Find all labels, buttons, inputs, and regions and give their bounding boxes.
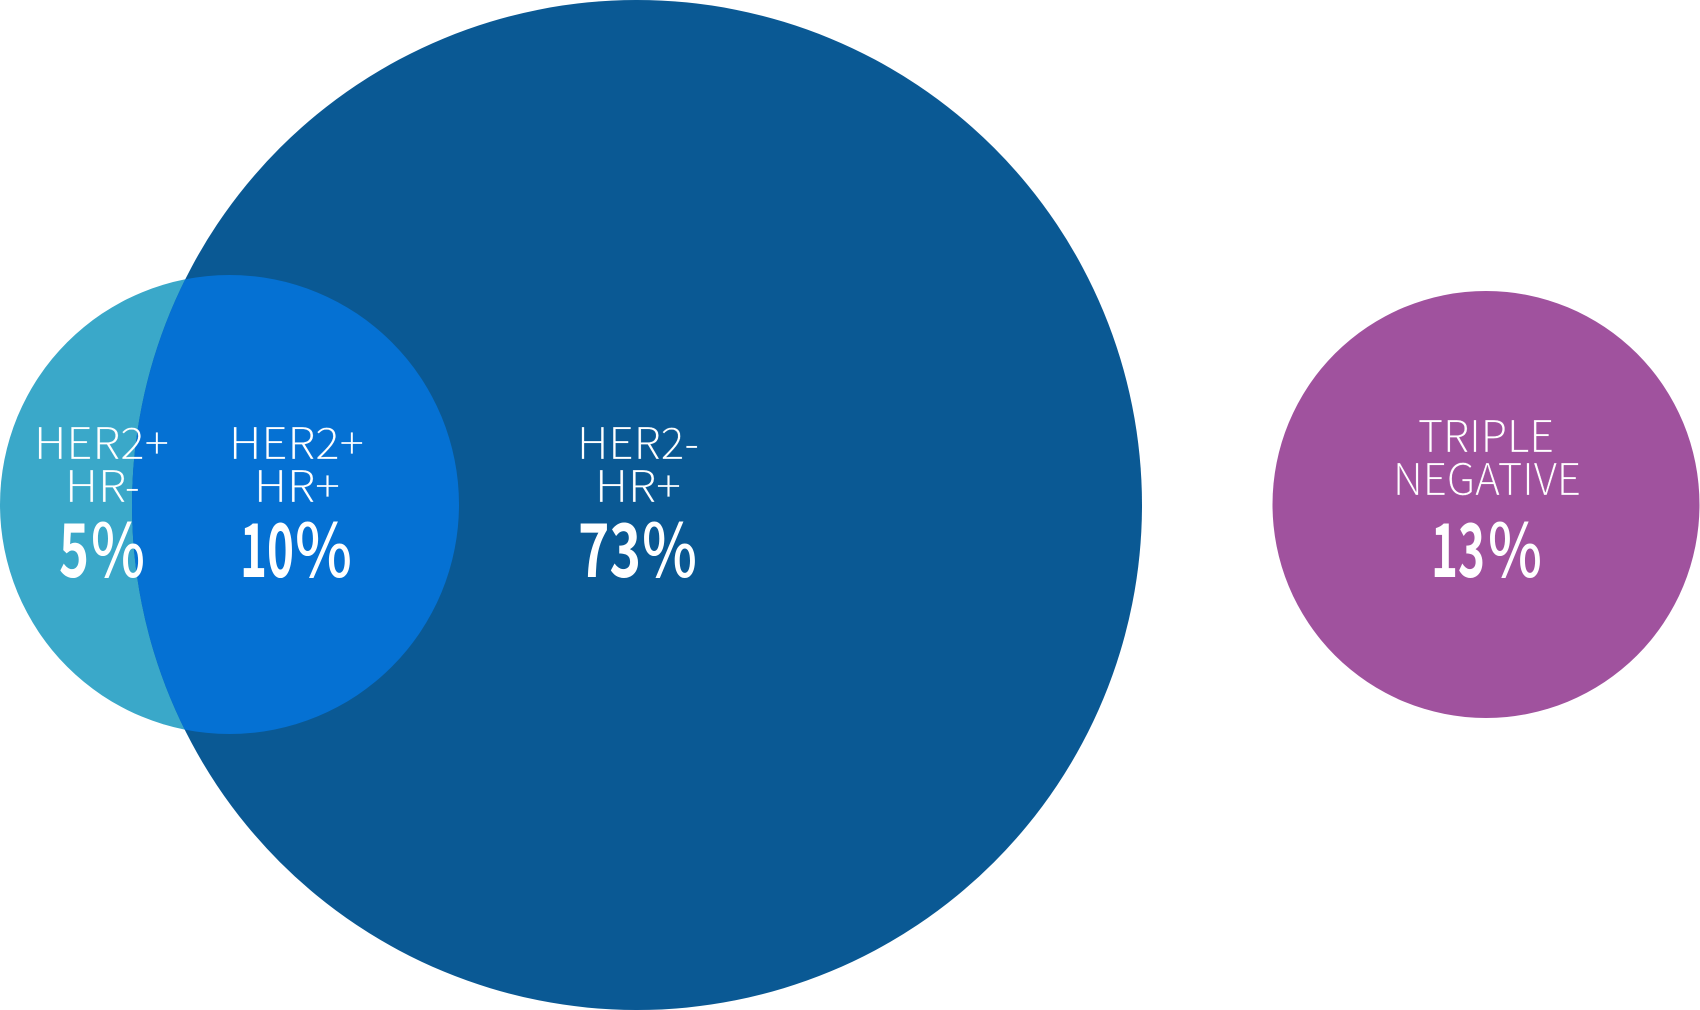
label: HER2+ HR+ 10%: HER2+ (229, 408, 364, 472)
circle overlap: HER2+ HR+ (132, 275, 459, 734)
circle: triple negative (1272, 291, 1700, 718)
label: triple negative 13%: TRIPLE (1418, 401, 1554, 465)
label: HER2+ HR- 5%: HER2+ (34, 408, 169, 472)
label: HER2- HR+ 73%: HER2- (577, 408, 699, 472)
label: triple negative 13%: % (1488, 492, 1542, 599)
circle: HER2- HR+ (132, 0, 1142, 1010)
label: triple negative 13%: 13 (1431, 492, 1485, 599)
label: HER2+ HR+ 10%: % (295, 492, 352, 599)
label: HER2- HR+ 73%: % (642, 492, 697, 599)
label: HER2+ HR- 5%: HR- (65, 451, 140, 515)
circle: HER2+ HR- segment (0, 275, 459, 734)
label: HER2- HR+ 73%: 73 (578, 492, 641, 599)
label: HER2+ HR+ 10% (229, 408, 364, 599)
label: HER2+ HR- 5% (34, 408, 169, 599)
label: HER2+ HR- 5%: % (91, 492, 145, 599)
label: HER2- HR+ 73%: HR+ (595, 451, 681, 515)
label: triple negative 13%: NEGATIVE (1393, 444, 1581, 508)
label: triple negative 13% (1393, 401, 1581, 599)
label: HER2+ HR+ 10%: HR+ (254, 451, 340, 515)
label: HER2+ HR- 5%: 5 (59, 492, 89, 599)
label: HER2- HR+ 73% (577, 408, 699, 599)
label: HER2+ HR+ 10%: 10 (240, 492, 294, 599)
